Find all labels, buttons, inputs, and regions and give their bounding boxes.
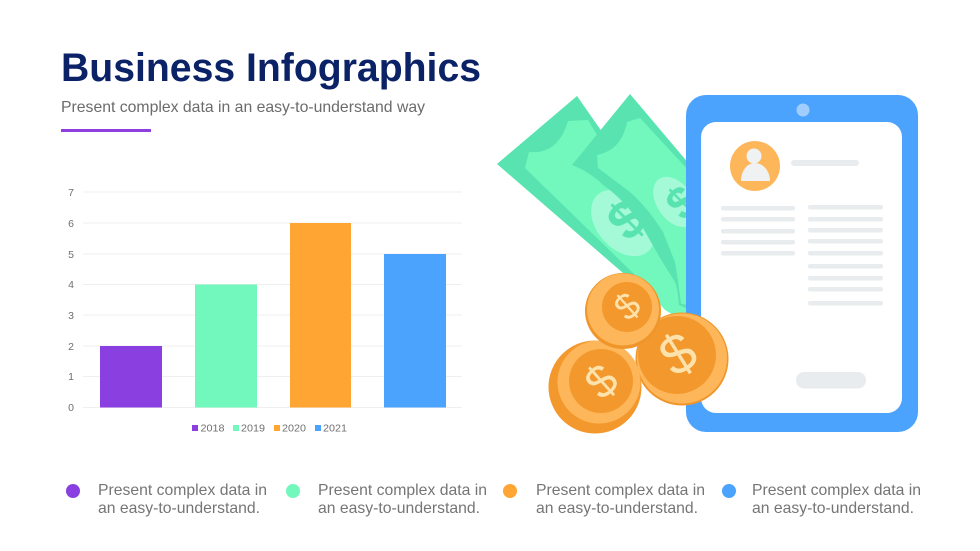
icon: top coin	[585, 273, 661, 349]
y axis labels: 4	[68, 279, 74, 291]
y axis labels: 2	[68, 341, 74, 353]
bar: 2020	[290, 223, 351, 408]
chart legend: 2019	[241, 422, 265, 434]
y axis labels: 6	[68, 218, 74, 230]
right text lines	[808, 205, 883, 306]
legend item: orange: an easy-to-understand.	[536, 500, 698, 517]
y axis labels: 7	[68, 187, 74, 199]
icon: top coin: $	[606, 284, 649, 328]
subtitle: Present complex data in an easy-to-understand way	[61, 99, 425, 116]
tablet button	[796, 372, 866, 388]
icon: front banknote: $	[655, 175, 710, 230]
y axis labels: 5	[68, 249, 74, 261]
icon: bottom-left coin	[548, 340, 642, 434]
bar: 2019	[195, 284, 257, 408]
legend item: orange	[503, 482, 705, 517]
bar: 2021	[384, 254, 446, 408]
icon: bottom-left coin: $	[574, 353, 628, 409]
chart legend	[192, 422, 347, 434]
profile name line	[791, 160, 859, 166]
chart legend: 2020	[282, 422, 306, 434]
legend item: blue	[722, 482, 921, 517]
icon: back banknote: $	[595, 188, 659, 252]
y axis labels: 0	[68, 402, 74, 414]
y axis labels: 1	[68, 371, 74, 383]
left text lines	[721, 206, 795, 256]
y axis labels	[68, 187, 74, 414]
legend item: purple: Present complex data in	[98, 482, 267, 499]
legend item: green: an easy-to-understand.	[318, 500, 480, 517]
bar chart	[68, 187, 462, 434]
legend item: blue: an easy-to-understand.	[752, 500, 914, 517]
legend item: purple: an easy-to-understand.	[98, 500, 260, 517]
icon: large coin	[636, 312, 728, 406]
legend item: orange: Present complex data in	[536, 482, 705, 499]
bar: 2018	[100, 346, 162, 408]
y axis labels: 3	[68, 310, 74, 322]
chart legend: 2021	[323, 422, 347, 434]
icon: profile avatar	[730, 141, 780, 191]
icon: back banknote	[497, 96, 690, 325]
legend item: green: Present complex data in	[318, 482, 487, 499]
legend item: green	[286, 482, 487, 517]
icon: tablet	[686, 95, 918, 432]
legend item: purple	[66, 482, 267, 517]
title underline accent	[61, 129, 151, 132]
illustration: money and tablet	[497, 94, 918, 434]
icon: front banknote	[572, 94, 710, 310]
chart legend: 2018	[200, 422, 225, 434]
icon: large coin: $	[648, 319, 708, 389]
legend item: blue: Present complex data in	[752, 482, 921, 499]
title: Business Infographics	[61, 46, 481, 90]
